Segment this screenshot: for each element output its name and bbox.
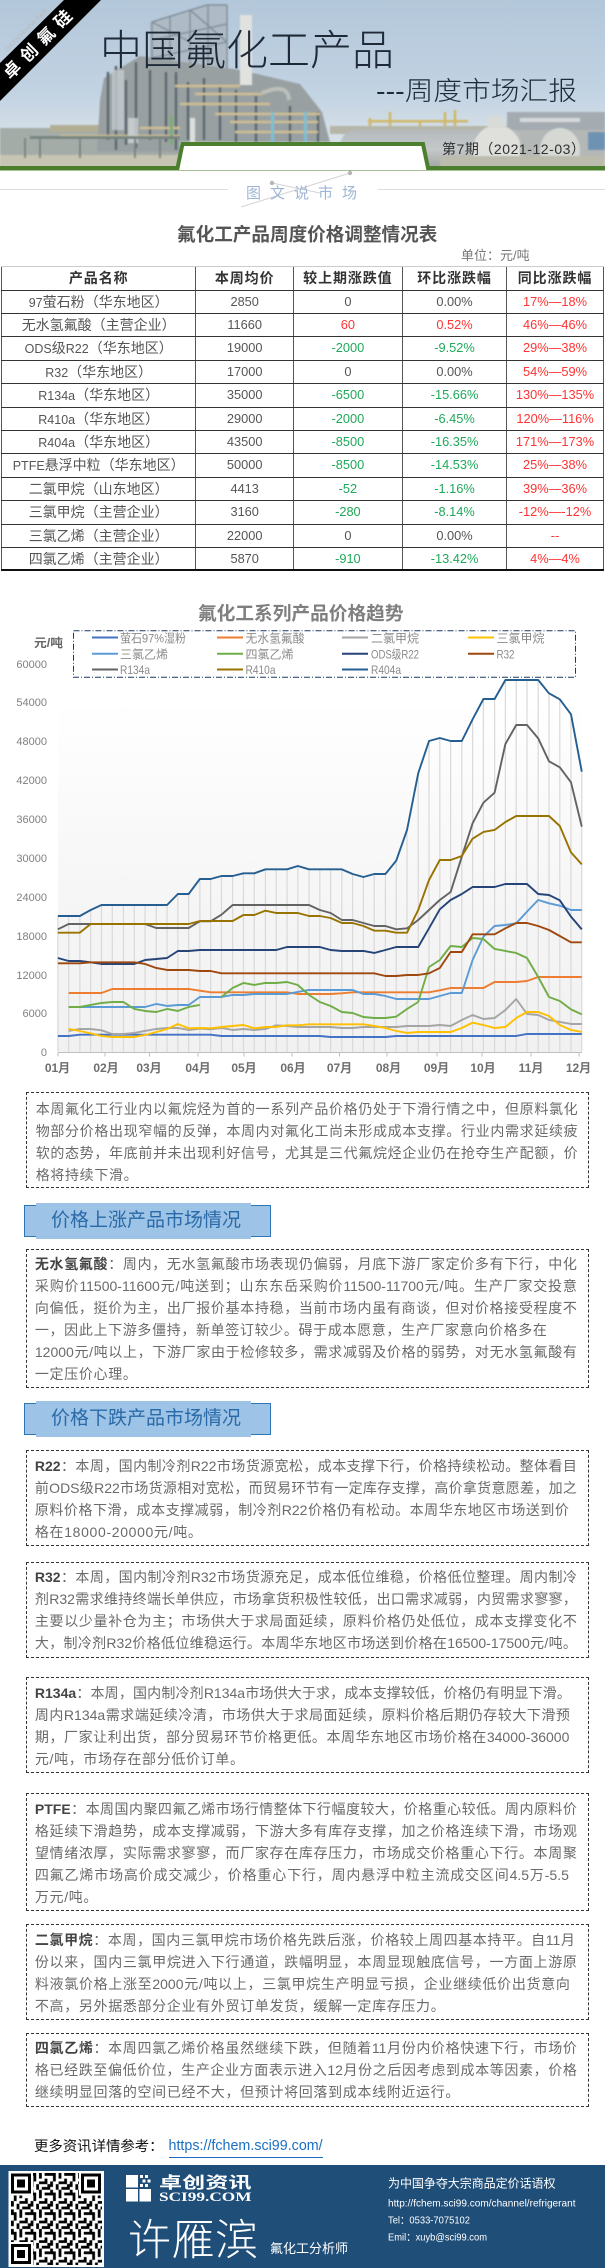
- row: anhydrous HF: 46%—46%: [523, 317, 587, 332]
- row: chloroform: -8.14%: [434, 504, 475, 519]
- text box: tetrachloroethylene: 四氯乙烯：本周四氯乙烯价格虽然继续下跌，但随着11月份内价格快速下行，市场价: [35, 2040, 577, 2056]
- row: tetrachloroethylene: [1, 548, 604, 571]
- series: R410a: [58, 816, 582, 933]
- row: R32: [1, 361, 604, 384]
- row: R22: 19000: [227, 340, 262, 355]
- row: trichloroethylene: 0: [344, 528, 351, 542]
- y axis labels: 42000: [16, 775, 47, 787]
- text box: R32: 剂R32需求维持终端长单供应，市场拿货积极性较低，出口需求减弱，内贸需求寥寥，: [35, 1591, 577, 1607]
- x axis: 05月: [231, 1061, 257, 1075]
- slogan and contacts: 为中国争夺大宗商品定价话语权: [388, 2176, 556, 2190]
- y axis labels: 60000: [16, 659, 47, 671]
- x axis: 11月: [519, 1061, 543, 1075]
- x axis: 12月: [566, 1061, 591, 1075]
- corner ribbon: 卓创氟硅: [0, 2, 81, 83]
- y axis unit: 元/吨: [34, 635, 63, 650]
- row: R32: 54%—59%: [523, 364, 587, 379]
- text box: R22: 前ODS级R22市场货源相对宽松，而贸易环节有一定库存支撑，高价拿货意愿差，加之: [35, 1480, 577, 1496]
- slogan and contacts: http://fchem.sci99.com/channel/refrigerant: [388, 2198, 576, 2210]
- row: R22: ODS级R22（华东地区）: [25, 340, 173, 356]
- legend: R404a: [371, 663, 401, 677]
- summary text box: 软的态势，年底前并未出现利好信号，尤其是三代氟烷烃企业仍在抢夺生产配额，价: [36, 1145, 578, 1161]
- row: R410a: R410a（华东地区）: [38, 411, 159, 427]
- row: trichloroethylene: 三氯乙烯（主营企业）: [29, 528, 169, 544]
- text box: PTFE: 格延续下滑趋势，成本支撑减弱，下游大多有库存支撑，加之价格连续下滑，市场观: [35, 1823, 577, 1839]
- row: PTFE: 50000: [227, 457, 262, 472]
- x axis: 02月: [93, 1061, 119, 1075]
- row: fluorspar: [1, 291, 604, 314]
- text box: R32: [26, 1562, 588, 1658]
- text box: PTFE: 四氟乙烯市场高价成交减少，价格重心下行，周内悬浮中粒主流成交区间4.5万-5.5: [35, 1867, 569, 1883]
- header banner with plant photo: [0, 0, 605, 170]
- row: R404a: 171%—173%: [516, 434, 594, 449]
- summary text box: [26, 1092, 588, 1188]
- row: dichloromethane: [1, 478, 604, 501]
- text box: dichloromethane: 不高，另外据悉部分企业有外贸订单发货，缓解一定库存压力。: [35, 1998, 445, 2014]
- x axis: 06月: [280, 1061, 306, 1075]
- row: anhydrous HF: 11660: [227, 317, 262, 332]
- summary text box: 格将持续下滑。: [36, 1167, 138, 1183]
- SCI99 logo: [126, 2174, 252, 2204]
- legend: 三氯甲烷: [496, 632, 544, 646]
- row: fluorspar: 0.00%: [436, 294, 473, 309]
- row: R32: 17000: [227, 364, 262, 379]
- row: R404a: [1, 431, 604, 454]
- text box: anhydrous HF: 向偏低，挺价为主，出厂报价基本持稳，当前市场内虽有商谈，但对价格接受程度不: [35, 1300, 577, 1316]
- row: R410a: -6.45%: [434, 411, 475, 426]
- heading: falling products: [24, 1403, 270, 1435]
- series: tetrachloroethylene, first segment: [69, 1002, 200, 1012]
- series: trichloroethylene: [69, 900, 582, 1007]
- y axis labels: 0: [41, 1047, 47, 1059]
- row: R404a: -16.35%: [431, 434, 478, 449]
- y axis labels: 18000: [16, 931, 47, 943]
- row: fluorspar: 0: [344, 294, 351, 309]
- legend: 二氯甲烷: [371, 632, 419, 646]
- heading: falling products: 价格下跌产品市场情况: [51, 1408, 241, 1429]
- text box: R32: 主要以少量补仓为主；市场供大于求局面延续，原料价格仍处低位，成本支撑变化不: [35, 1613, 577, 1629]
- table header: 产品名称: [69, 270, 128, 286]
- text box: tetrachloroethylene: 继续明显回落的空间已经不大，但预计将回落到成本线附近运行。: [35, 2084, 460, 2100]
- text box: tetrachloroethylene: [26, 2033, 588, 2107]
- text box: tetrachloroethylene: 格已经跌至偏低价位，生产企业方面表示进入12月份之后因考虑到成本等因素，价格: [35, 2062, 577, 2078]
- row: R22: -9.52%: [434, 340, 475, 355]
- legend: R134a: [120, 663, 150, 677]
- text box: R22: 格在18000-20000元/吨。: [35, 1524, 203, 1540]
- text box: anhydrous HF: 12000元/吨以上，下游厂家由于检修较多，需求减弱及价格的弱势，对无水氢氟酸有: [35, 1344, 577, 1360]
- more info link: [34, 2138, 323, 2158]
- x axis: 08月: [376, 1061, 401, 1075]
- section tag: 图文说市场: [0, 170, 605, 208]
- corner ribbon: ZHUOCHUANG F&SI: [4, 8, 50, 53]
- row: anhydrous HF: 无水氢氟酸（主营企业）: [22, 317, 176, 333]
- line chart: price trends: [16, 630, 591, 1075]
- row: PTFE: -14.53%: [431, 457, 478, 472]
- slogan and contacts: Emil：xuyb@sci99.com: [388, 2232, 487, 2244]
- price table: [1, 266, 604, 571]
- row: trichloroethylene: 0.00%: [436, 528, 473, 542]
- series: ODS R22: [58, 884, 582, 964]
- row: fluorspar: 17%—18%: [523, 294, 587, 309]
- row: R22: -2000: [332, 340, 364, 355]
- analyst title: 氟化工分析师: [270, 2241, 348, 2256]
- SCI99 logo: SCI99.COM: [159, 2190, 252, 2204]
- text box: PTFE: PTFE：本周国内聚四氟乙烯市场行情整体下行幅度较大，价格重心较低。周内原料价: [35, 1801, 577, 1817]
- table header: 较上期涨跌值: [303, 270, 393, 286]
- row: tetrachloroethylene: -910: [335, 551, 361, 566]
- issue number and date: 第7期（2021-12-03）: [442, 141, 585, 157]
- text box: dichloromethane: 二氯甲烷：本周，国内三氯甲烷市场价格先跌后涨，价格较上周四基本持平。自11月: [35, 1932, 575, 1948]
- x axis: 01月: [45, 1061, 70, 1075]
- row: tetrachloroethylene: 四氯乙烯（主营企业）: [29, 551, 169, 567]
- series: dichloromethane: [69, 999, 582, 1034]
- row: anhydrous HF: [1, 314, 604, 337]
- text: https://fchem.sci99.com/: [168, 2138, 323, 2154]
- table header: 环比涨跌幅: [417, 270, 492, 286]
- row: R134a: 130%—135%: [516, 387, 594, 402]
- text box: anhydrous HF: 一定压价心理。: [35, 1366, 138, 1382]
- text box: PTFE: 望情绪浓厚，实际需求寥寥，而厂家存在库存压力，市场成交价格重心下行。本周聚: [35, 1845, 577, 1861]
- row: chloroform: 三氯甲烷（主营企业）: [29, 504, 169, 520]
- QR code: [8, 2171, 104, 2267]
- table header: [1, 267, 604, 291]
- row: tetrachloroethylene: 5870: [230, 551, 259, 566]
- legend: [74, 630, 576, 677]
- heading: rising products: 价格上涨产品市场情况: [51, 1210, 241, 1231]
- y axis labels: 30000: [16, 853, 47, 865]
- series: R134a: [58, 725, 582, 929]
- series: anhydrous HF: [69, 977, 582, 994]
- row: dichloromethane: 39%—36%: [523, 481, 587, 496]
- text box: anhydrous HF: 采购价11500-11600元/吨送到；山东东岳采购价11500-11700元/吨。生产厂家交投意: [35, 1278, 577, 1294]
- subtitle: ---周度市场汇报: [376, 76, 577, 106]
- plant structures: [0, 5, 330, 168]
- row: tetrachloroethylene: -13.42%: [431, 551, 478, 566]
- text box: R134a: 周内R134a需求端延续冷清，市场供大于求局面延续，原料价格后期仍存较大下滑预: [35, 1707, 570, 1723]
- y axis labels: 48000: [16, 736, 47, 748]
- row: R32: 0.00%: [436, 364, 473, 379]
- row: PTFE: 25%—38%: [523, 457, 587, 472]
- x axis: 07月: [327, 1061, 352, 1075]
- SCI99 logo: 卓创资讯: [159, 2174, 252, 2192]
- summary text box: 物部分价格出现窄幅的反弹，本周内对氟化工尚未形成成本支撑。行业内需求延续疲: [36, 1123, 578, 1139]
- text box: anhydrous HF: 无水氢氟酸：周内，无水氢氟酸市场表现仍偏弱，月底下游厂家定价多有下行，中化: [35, 1256, 577, 1272]
- row: R404a: -8500: [332, 434, 364, 449]
- text box: dichloromethane: 份以来，国内三氯甲烷进入下行通道，跌幅明显，本周显现触底信号，一方面上游原: [35, 1954, 577, 1970]
- table header: 同比涨跌幅: [518, 270, 592, 286]
- row: R134a: -15.66%: [431, 387, 478, 402]
- row: R410a: [1, 408, 604, 431]
- x axis: 09月: [424, 1061, 449, 1075]
- legend: ODS级R22: [371, 648, 419, 662]
- row: tetrachloroethylene: 4%—4%: [530, 551, 580, 566]
- slogan and contacts: Tel：0533-7075102: [388, 2214, 470, 2226]
- text box: anhydrous HF: 一，因此上下游多僵持，新单签订较少。碍于成本愿意，生产厂家意向价格多在: [35, 1322, 547, 1338]
- row: fluorspar: 2850: [230, 294, 259, 309]
- text box: PTFE: [26, 1793, 588, 1911]
- row: R32: R32（华东地区）: [45, 364, 152, 380]
- y axis labels: 12000: [16, 970, 47, 982]
- row: R404a: R404a（华东地区）: [38, 434, 159, 450]
- row: chloroform: -280: [335, 504, 361, 519]
- green frame with white tab: [0, 144, 605, 172]
- section tag: 图文说市场: 图文说市场: [246, 185, 357, 202]
- series: fluorspar: [58, 1034, 582, 1037]
- row: dichloromethane: 4413: [230, 481, 259, 496]
- row: PTFE: [1, 454, 604, 478]
- summary text box: 本周氟化工行业内以氟烷烃为首的一系列产品价格仍处于下滑行情之中，但原料氯化: [36, 1101, 578, 1117]
- text box: R134a: [26, 1677, 588, 1773]
- row: R134a: R134a（华东地区）: [38, 387, 159, 403]
- y axis labels: [16, 659, 47, 1059]
- row: chloroform: 3160: [230, 504, 259, 519]
- legend: 三氯乙烯: [120, 648, 168, 662]
- drop lines and series: [58, 680, 582, 1052]
- row: dichloromethane: 二氯甲烷（山东地区）: [29, 481, 169, 497]
- more info link: 更多资讯详情参考：: [34, 2139, 164, 2155]
- series: R404a: [58, 680, 582, 916]
- row: chloroform: -12%—-12%: [519, 504, 591, 519]
- text box: R134a: 元/吨，市场存在部分低价订单。: [35, 1751, 245, 1767]
- series: R32: [58, 923, 582, 976]
- row: R22: 29%—38%: [523, 340, 587, 355]
- row: trichloroethylene: [1, 524, 604, 548]
- plot background: [58, 700, 582, 1052]
- unit note: 单位：元/吨: [461, 248, 530, 263]
- x axis: 03月: [136, 1061, 162, 1075]
- text box: R22: [26, 1450, 588, 1546]
- row: R410a: 120%—116%: [516, 411, 594, 426]
- row: anhydrous HF: 0.52%: [436, 317, 473, 332]
- legend: R410a: [246, 663, 276, 677]
- series: tetrachloroethylene, second segment: [221, 938, 582, 1018]
- analyst name: 许雁滨: [128, 2217, 258, 2265]
- row: R134a: -6500: [332, 387, 364, 402]
- legend: R32: [496, 648, 515, 662]
- row: R134a: 35000: [227, 387, 262, 402]
- x axis: 04月: [185, 1061, 211, 1075]
- row: R134a: [1, 384, 604, 408]
- row: PTFE: PTFE悬浮中粒（华东地区）: [13, 457, 185, 473]
- y axis labels: 6000: [23, 1008, 47, 1020]
- y axis labels: 24000: [16, 892, 47, 904]
- row: fluorspar: 97萤石粉（华东地区）: [29, 294, 169, 310]
- legend: 无水氢氟酸: [246, 630, 304, 646]
- footer: [0, 2165, 605, 2268]
- text box: anhydrous HF: [26, 1249, 588, 1388]
- row: R410a: 29000: [227, 411, 262, 426]
- y axis labels: 36000: [16, 814, 47, 826]
- table title: 氟化工产品周度价格调整情况表: [177, 224, 437, 245]
- row: trichloroethylene: --: [551, 528, 559, 542]
- row: dichloromethane: -1.16%: [434, 481, 475, 496]
- legend: 四氯乙烯: [246, 648, 294, 662]
- row: trichloroethylene: 22000: [227, 528, 262, 542]
- text box: dichloromethane: [26, 1924, 588, 2020]
- row: R410a: -2000: [332, 411, 364, 426]
- corner ribbon: [0, 0, 101, 101]
- row: dichloromethane: -52: [339, 481, 357, 496]
- table header: 本周均价: [215, 270, 274, 286]
- text box: R32: R32：本周，国内制冷剂R32市场货源充足，成本低位维稳，价格低位整理。周内制冷: [35, 1569, 577, 1585]
- title: 中国氟化工产品: [100, 27, 394, 74]
- distant plant and tanks: [330, 110, 605, 175]
- row: R32: 0: [344, 364, 351, 379]
- text box: R134a: R134a：本周，国内制冷剂R134a市场供大于求，成本支撑较低，价格仍有明显下滑。: [35, 1685, 571, 1701]
- row: chloroform: [1, 501, 604, 524]
- text box: R22: 原料价格下滑，成本支撑减弱，制冷剂R22价格仍有松动。本周华东地区市场送到价: [35, 1502, 569, 1518]
- text box: R32: 大，制冷剂R32价格低位维稳运行。本周华东地区市场送到价格在16500-17500元/吨。: [35, 1635, 577, 1651]
- legend: 萤石97%湿粉: [120, 630, 186, 646]
- text box: R134a: 期，厂家让利出货，部分贸易环节价格更低。本周华东地区市场价格在34000-36000: [35, 1729, 569, 1745]
- text box: R22: R22：本周，国内制冷剂R22市场货源宽松，成本支撑下行，价格持续松动。整体看目: [35, 1458, 577, 1474]
- chart title: 氟化工系列产品价格趋势: [198, 603, 404, 624]
- heading: rising products: [24, 1205, 270, 1237]
- text box: dichloromethane: 料液氯价格上涨至2000元/吨以上，三氯甲烷生产明显亏损，企业继续低价出货意向: [35, 1976, 570, 1992]
- text box: PTFE: 万元/吨。: [35, 1889, 98, 1905]
- row: anhydrous HF: 60: [341, 317, 355, 332]
- slogan and contacts: [388, 2176, 576, 2244]
- y axis labels: 54000: [16, 697, 47, 709]
- x axis: [45, 1052, 591, 1075]
- row: R404a: 43500: [227, 434, 262, 449]
- row: PTFE: -8500: [332, 457, 364, 472]
- sky: [0, 0, 605, 170]
- series: chloroform: [69, 1012, 582, 1037]
- x axis: 10月: [470, 1061, 496, 1075]
- row: R22: [1, 337, 604, 361]
